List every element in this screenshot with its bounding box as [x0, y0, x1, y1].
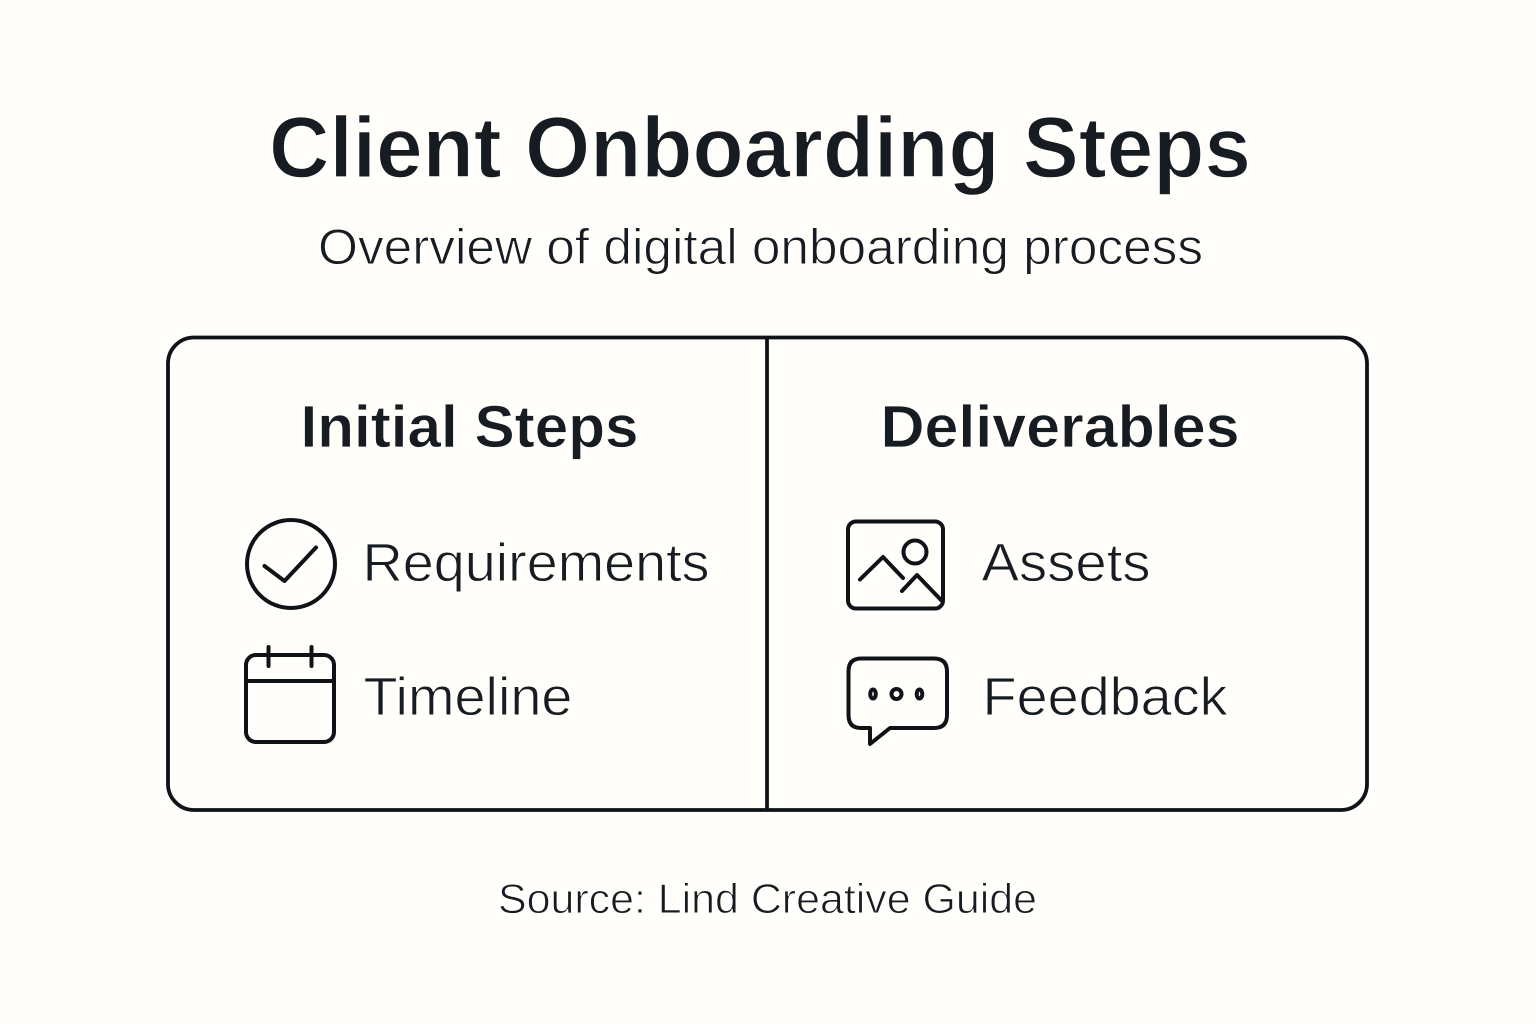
- heading: initial steps: Initial Steps: [300, 394, 638, 460]
- title: Client Onboarding Steps: [269, 100, 1251, 196]
- icon: calendar: [246, 647, 334, 742]
- panel: two-column card: [168, 337, 1367, 810]
- heading: deliverables: Deliverables: [880, 394, 1240, 460]
- icon: image: [848, 522, 943, 608]
- label: timeline: Timeline: [364, 667, 572, 727]
- subtitle: Overview of digital onboarding process: [318, 219, 1203, 275]
- label: assets: Assets: [982, 533, 1150, 593]
- icon: speech bubble: [848, 658, 947, 744]
- column divider: [765, 337, 769, 810]
- panel outline: [168, 338, 1367, 810]
- label: feedback: Feedback: [982, 667, 1229, 727]
- source note: Source: Lind Creative Guide: [498, 875, 1037, 922]
- icon: check circle: [247, 520, 335, 608]
- panel: deliverables: [848, 394, 1240, 744]
- panel: initial steps: [246, 394, 710, 742]
- label: requirements: Requirements: [362, 533, 710, 593]
